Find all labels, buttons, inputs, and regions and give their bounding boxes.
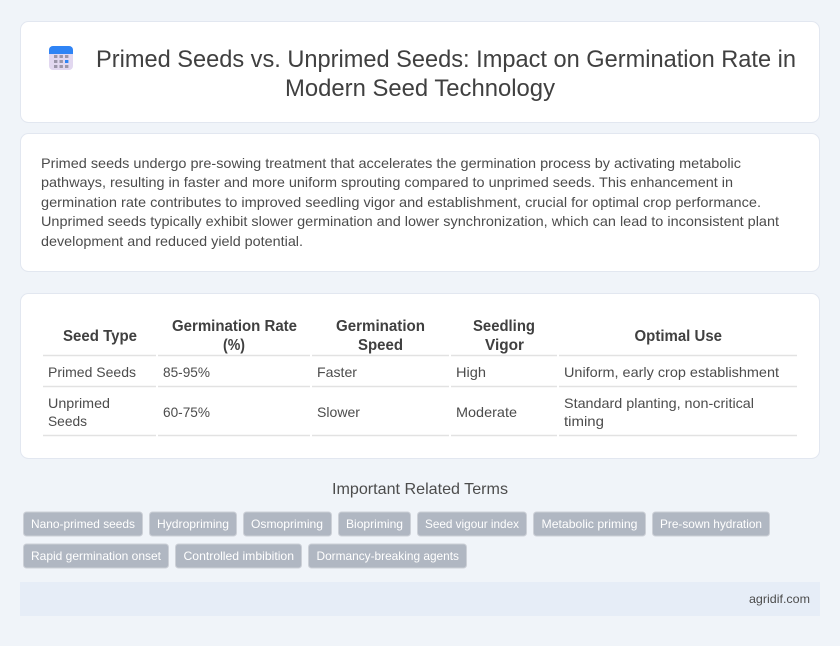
tags: related terms: Metabolic priming bbox=[542, 517, 638, 531]
text block: description bbox=[41, 155, 779, 249]
table row: unprimed seeds: Slower bbox=[317, 404, 360, 420]
icon: calendar bbox=[49, 46, 73, 70]
footer bar bbox=[20, 582, 820, 616]
table row: unprimed seeds: timing bbox=[564, 413, 604, 429]
footer bar: agridif.com bbox=[749, 592, 810, 606]
tags: related terms: Nano-primed seeds bbox=[31, 517, 135, 531]
panel: comparison table bbox=[20, 294, 820, 458]
table row: unprimed seeds bbox=[48, 395, 754, 429]
title: Modern Seed Technology bbox=[285, 75, 555, 102]
text block: description: germination rate contributes to improved seedling vigor and establishment, crucial for optimal crop performance. bbox=[41, 194, 761, 210]
table row: primed seeds: High bbox=[456, 364, 486, 380]
table header: Speed bbox=[358, 337, 403, 354]
heading: related terms: Important Related Terms bbox=[332, 481, 508, 498]
tags: related terms: Dormancy-breaking agents bbox=[316, 549, 459, 563]
title bbox=[96, 46, 796, 102]
tags: related terms bbox=[24, 512, 770, 568]
text block: description: pathways, resulting in faster and more uniform sprouting compared to unprimed seeds. This enhancement in bbox=[41, 174, 733, 190]
table row: primed seeds: Primed Seeds bbox=[48, 364, 136, 380]
tags: related terms: Hydropriming bbox=[157, 517, 229, 531]
text block: description: Unprimed seeds typically exhibit slower germination and lower synchronization, which can lead to inconsistent plant bbox=[41, 213, 779, 229]
text block: description: Primed seeds undergo pre-sowing treatment that accelerates the germination process by activating metabolic bbox=[41, 155, 741, 171]
tags: related terms: Osmopriming bbox=[251, 517, 323, 531]
table row: primed seeds bbox=[48, 364, 779, 380]
tags: related terms: Seed vigour index bbox=[425, 517, 519, 531]
table row: primed seeds: 85-95% bbox=[163, 364, 210, 380]
title: Primed Seeds vs. Unprimed Seeds: Impact on Germination Rate in bbox=[96, 46, 796, 73]
tags: related terms: Biopriming bbox=[346, 517, 403, 531]
tags: related terms: Controlled imbibition bbox=[184, 549, 294, 563]
tags: related terms: Rapid germination onset bbox=[31, 549, 162, 563]
panel: description bbox=[20, 134, 820, 272]
text block: description: development and reduced yield potential. bbox=[41, 233, 303, 249]
table header: Germination bbox=[336, 318, 425, 335]
table rules bbox=[43, 356, 797, 436]
table row: unprimed seeds: Moderate bbox=[456, 404, 517, 420]
header panel bbox=[20, 22, 820, 122]
table row: unprimed seeds: Unprimed bbox=[48, 395, 110, 411]
table header: Seed Type bbox=[63, 328, 137, 345]
table header: Seedling bbox=[473, 318, 535, 335]
table header: Vigor bbox=[485, 337, 524, 354]
table header: Germination Rate bbox=[172, 318, 297, 335]
table row: unprimed seeds: Seeds bbox=[48, 413, 87, 429]
table header: (%) bbox=[223, 337, 245, 354]
tags: related terms: Pre-sown hydration bbox=[660, 517, 762, 531]
table row: unprimed seeds: Standard planting, non-critical bbox=[564, 395, 754, 411]
table row: unprimed seeds: 60-75% bbox=[163, 404, 210, 420]
table header: Optimal Use bbox=[634, 328, 722, 345]
table header bbox=[63, 318, 722, 354]
table row: primed seeds: Uniform, early crop establishment bbox=[564, 364, 779, 380]
table row: primed seeds: Faster bbox=[317, 364, 357, 380]
